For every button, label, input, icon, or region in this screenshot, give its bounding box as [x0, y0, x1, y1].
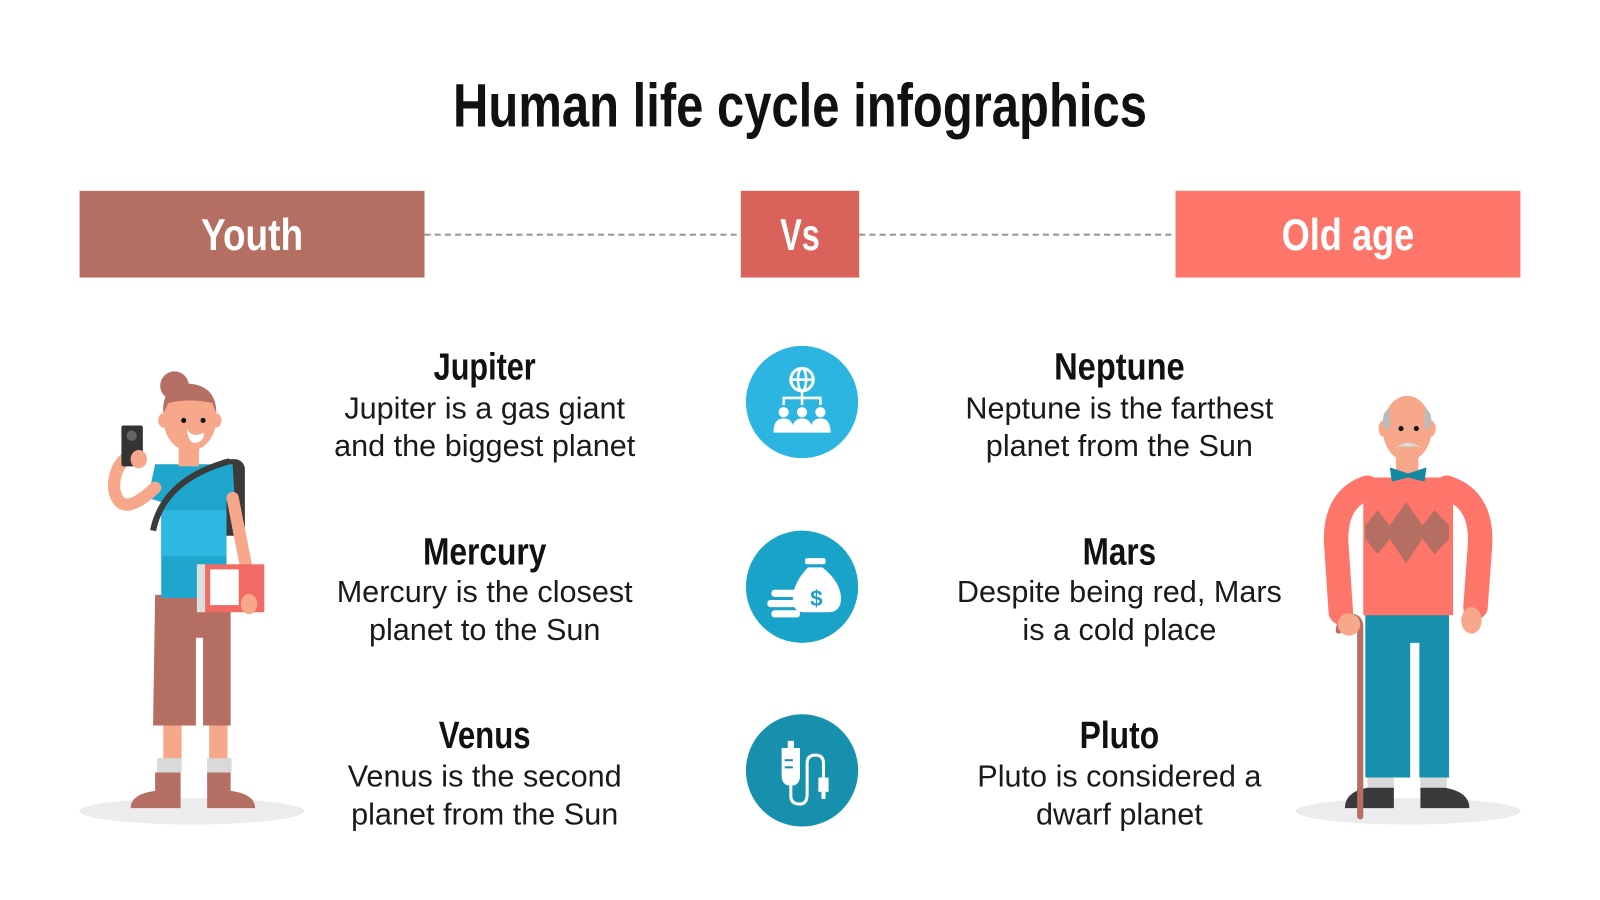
text block: Mars: Despite being red, Mars — [957, 575, 1282, 609]
text block: Mars: Mars — [1083, 530, 1156, 572]
text block: Venus — [348, 714, 622, 831]
text block: Jupiter — [334, 346, 636, 463]
title: Human life cycle infographics — [453, 72, 1147, 140]
icon: network people — [746, 346, 858, 458]
header: Youth — [80, 191, 424, 278]
text block: Neptune: planet from the Sun — [986, 429, 1253, 463]
text block: Mercury: Mercury is the closest — [337, 575, 633, 609]
text block: Pluto: Pluto — [1080, 714, 1159, 756]
text block: Neptune: Neptune — [1054, 346, 1185, 388]
header: Old age — [1176, 191, 1520, 278]
text block: Jupiter: Jupiter is a gas giant — [344, 391, 626, 425]
icon: money bag: $ — [810, 586, 823, 611]
text block: Jupiter: Jupiter — [434, 346, 536, 388]
icon: money bag — [746, 531, 858, 643]
text block: Mercury: planet to the Sun — [369, 613, 600, 647]
figure: youth — [80, 371, 304, 824]
text block: Mars: is a cold place — [1022, 613, 1216, 647]
icon: IV drip — [746, 714, 858, 827]
text block: Neptune — [965, 346, 1274, 463]
header: Vs: Vs — [780, 209, 820, 260]
text block: Venus: Venus — [439, 714, 531, 756]
text block: Pluto — [977, 714, 1262, 831]
text block: Mercury: Mercury — [423, 530, 546, 572]
text block: Mercury — [337, 530, 633, 647]
text block: Mars — [957, 530, 1282, 647]
text block: Venus: planet from the Sun — [351, 797, 618, 831]
header: Youth: Youth — [201, 209, 303, 260]
text block: Venus: Venus is the second — [348, 760, 622, 794]
text block: Jupiter: and the biggest planet — [334, 429, 636, 463]
header: Vs — [741, 191, 859, 278]
header: Old age: Old age — [1282, 209, 1414, 260]
text block: Neptune: Neptune is the farthest — [965, 391, 1274, 425]
figure: old man — [1296, 396, 1520, 824]
text block: Pluto: Pluto is considered a — [977, 760, 1262, 794]
text block: Pluto: dwarf planet — [1036, 797, 1203, 831]
